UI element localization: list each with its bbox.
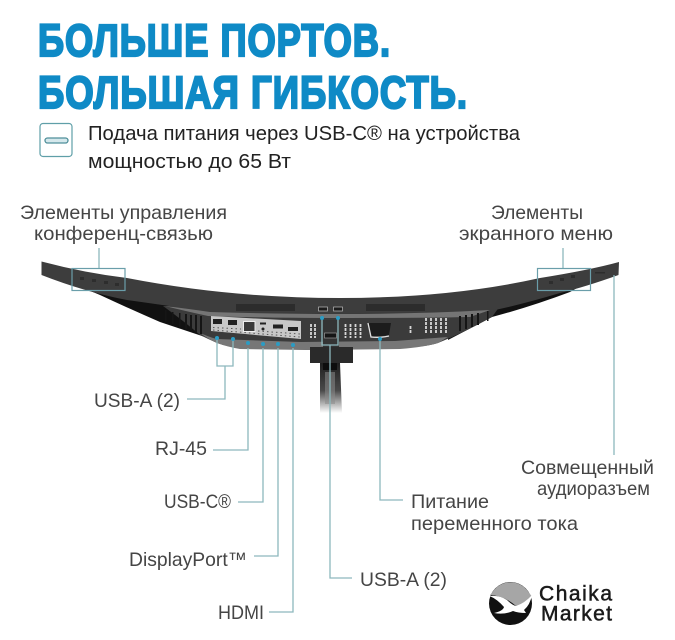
label: audio jack bbox=[521, 457, 654, 500]
label: USB-A right: USB-A (2) bbox=[360, 569, 447, 591]
label: conference controls bbox=[20, 202, 227, 245]
label: OSD controls: Элементы bbox=[491, 202, 583, 224]
monitor rear wedge shadow bbox=[76, 285, 210, 337]
port panel bbox=[211, 316, 301, 339]
label: audio jack: аудиоразъем bbox=[537, 478, 650, 500]
top USB-A ports bbox=[318, 307, 342, 311]
label: OSD controls: экранного меню bbox=[459, 223, 613, 245]
icon: USB-C port bbox=[40, 124, 72, 156]
label: AC power: переменного тока bbox=[411, 513, 578, 535]
label: RJ-45: RJ-45 bbox=[155, 438, 207, 460]
subtitle text: мощностью до 65 Вт bbox=[88, 150, 292, 173]
logo: Chaika Market bbox=[489, 582, 612, 626]
title: БОЛЬШЕ ПОРТОВ. bbox=[38, 15, 391, 66]
gray lower strip bbox=[200, 333, 448, 350]
label: HDMI: HDMI bbox=[218, 602, 264, 624]
faint control icons left bbox=[80, 277, 119, 286]
label: conference controls: Элементы управления bbox=[20, 202, 227, 224]
label: USB-C: USB-C® bbox=[164, 491, 232, 513]
ventilation grids bbox=[311, 318, 446, 338]
monitor bbox=[42, 262, 619, 413]
panel dots bbox=[213, 328, 300, 337]
faint control icons right bbox=[549, 272, 605, 284]
monitor front band bbox=[42, 262, 619, 313]
label: conference controls: конференц-связью bbox=[34, 223, 213, 245]
label: AC power bbox=[411, 491, 578, 535]
title bbox=[38, 15, 468, 118]
subtitle text bbox=[88, 122, 521, 173]
logo: Chaika Market: Market bbox=[541, 602, 612, 626]
monitor lower body bbox=[163, 306, 500, 350]
label: OSD controls bbox=[459, 202, 613, 245]
subtitle text: Подача питания через USB-C® на устройства bbox=[88, 122, 521, 145]
label: USB-A left: USB-A (2) bbox=[94, 390, 180, 412]
icon: gull in circle bbox=[489, 582, 532, 625]
AC power socket bbox=[368, 323, 391, 336]
title: БОЛЬШАЯ ГИБКОСТЬ. bbox=[38, 67, 468, 118]
logo: Chaika Market: Chaika bbox=[539, 582, 612, 606]
stand bbox=[310, 320, 353, 413]
gray band edge bbox=[165, 306, 490, 318]
label: DisplayPort: DisplayPort™ bbox=[129, 549, 247, 571]
label: AC power: Питание bbox=[411, 491, 489, 513]
label: audio jack: Совмещенный bbox=[521, 457, 654, 479]
vent slots bbox=[236, 304, 295, 311]
callout lines bbox=[72, 248, 614, 612]
